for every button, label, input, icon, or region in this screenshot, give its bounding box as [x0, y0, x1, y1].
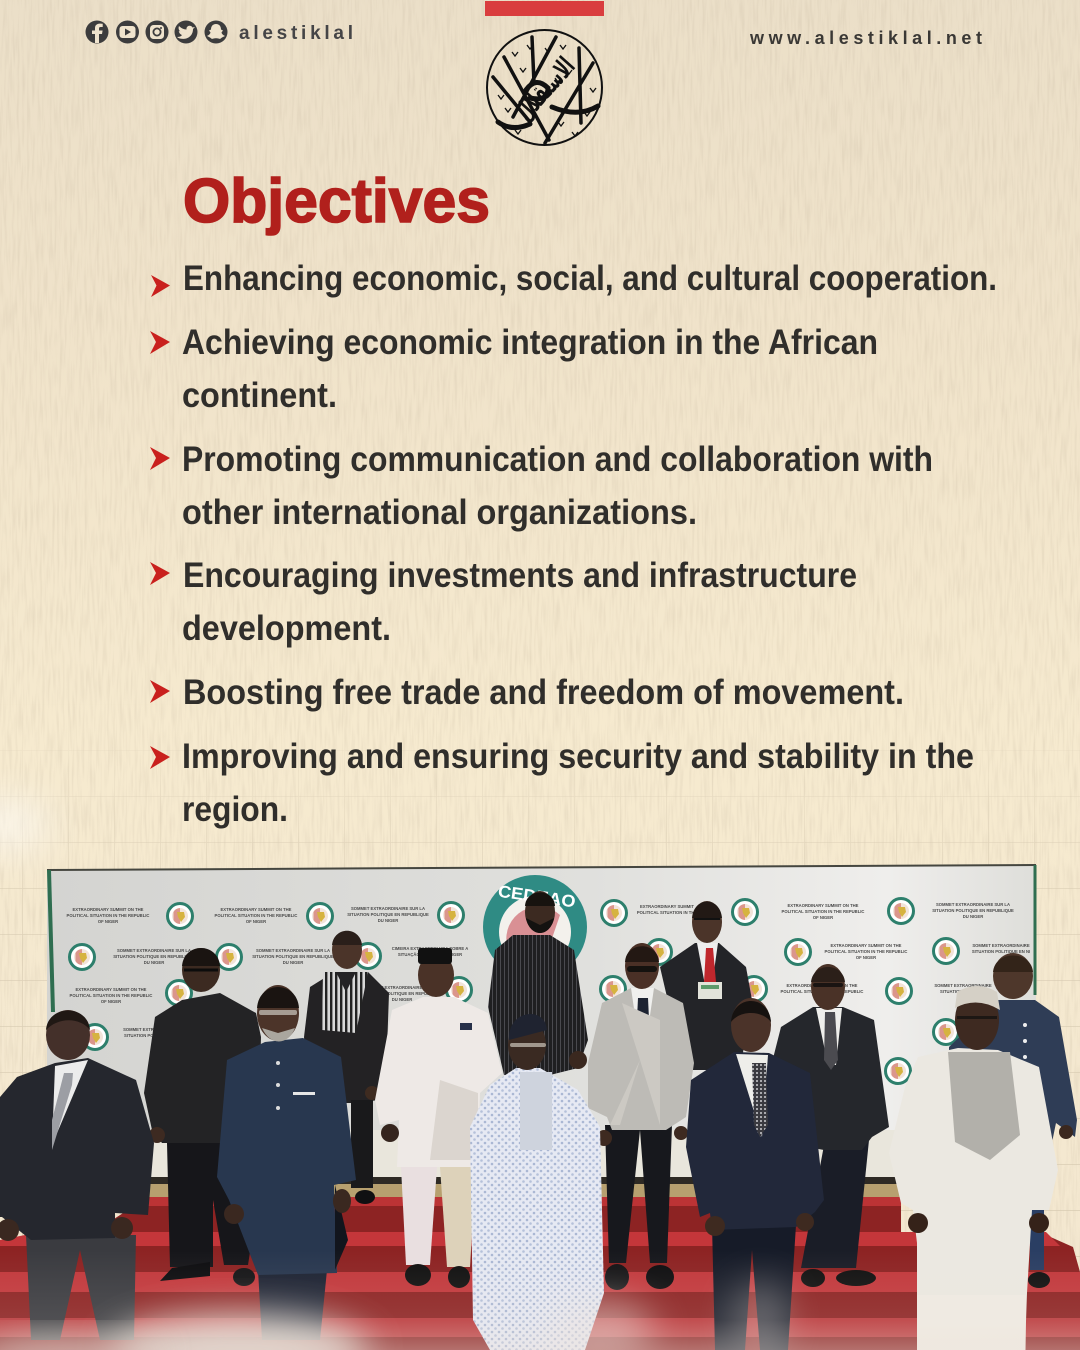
- handle text: alestiklal: [239, 23, 353, 44]
- icon: youtube: [116, 20, 139, 44]
- stage floor and steps: [0, 1177, 1080, 1350]
- mist at bottom of photo: [0, 1250, 1080, 1350]
- man: black shirt, back left: [144, 948, 261, 1286]
- red top bar: [485, 1, 604, 16]
- backdrop summit captions: EXTRAORDINARY SUMMIT ON THE: [831, 943, 902, 948]
- group photo of leaders: [0, 865, 1080, 1350]
- backdrop summit captions: SITUATION POLITIQUE EN REPUBLIQUE: [347, 912, 429, 917]
- backdrop summit captions: OF NIGER: [813, 915, 833, 920]
- backdrop summit captions: SOMMET EXTRA: [123, 1027, 157, 1032]
- objective 4: [182, 556, 857, 648]
- backdrop summit captions: EXTRAORDINARY SUMMIT ON THE: [73, 907, 144, 912]
- objective 1: Enhancing economic, social, and cultural cooperation.: [183, 259, 997, 298]
- arrow 2: [150, 331, 170, 354]
- objective 6: region.: [182, 790, 288, 829]
- man: white kaftan with black cap: [375, 948, 502, 1288]
- backdrop summit captions: EXTRAORDINARY SUMMIT ON THE: [787, 983, 858, 988]
- backdrop ECOWAS emblems: [70, 898, 958, 1084]
- man: denim shirt, far right: [949, 953, 1077, 1288]
- title: Objectives: [183, 167, 490, 236]
- backdrop summit captions: POLITICAL SITUATION IN THE REPUBLIC: [782, 909, 864, 914]
- icon: facebook: [86, 20, 108, 44]
- backdrop summit captions: SITUATION POLITIQUE EN NI: [972, 949, 1030, 954]
- backdrop summit captions: SOMMET EXTRAORDINAIRE: [972, 943, 1030, 948]
- objective 6: [182, 737, 974, 829]
- backdrop summit captions: OF NIGER: [856, 955, 876, 960]
- backdrop summit captions: SITUATION POLITIQUE EN REPUBLIQUE: [361, 991, 443, 996]
- objective 2: Achieving economic integration in the African: [182, 323, 878, 362]
- objective 6: Improving and ensuring security and stability in the: [182, 737, 974, 776]
- objective 4: development.: [182, 609, 391, 648]
- backdrop summit captions: [67, 902, 1030, 1038]
- man: striped panel tunic: [304, 931, 389, 1204]
- man: back right, red tie and badge: [660, 901, 752, 1070]
- backdrop summit captions: SOMMET EXTRAORDINAIRE SUR LA: [351, 906, 425, 911]
- backdrop summit captions: SOMMET EXTRAORDINAIRE: [934, 983, 992, 988]
- backdrop summit captions: DU NIGER: [283, 960, 303, 965]
- large CEDEAO emblem: CEDEAO: [497, 882, 577, 911]
- backdrop summit captions: SOMMET EXTRAORDINAIRE SUR LA: [256, 948, 330, 953]
- backdrop summit captions: SITUATION POLITIQUE EN REPUBLIQUE: [252, 954, 334, 959]
- backdrop summit captions: POLITICAL SITUATION IN THE REPUBLIC: [67, 913, 149, 918]
- backdrop summit captions: DU NIGER: [144, 960, 164, 965]
- backdrop summit captions: SITUATION POLITIQUE EN REPUBLIQUE: [932, 908, 1014, 913]
- man: dark suit, far left: [0, 1010, 154, 1340]
- backdrop summit captions: SOMMET EXTRAORDINAIRE SUR LA: [936, 902, 1010, 907]
- icon: twitter: [174, 20, 198, 44]
- man: dark suit, right of centre back: [765, 964, 889, 1287]
- logo: calligraphic roundel: [487, 30, 602, 145]
- arrow 5: [150, 680, 170, 703]
- backdrop summit captions: SOMMET EXTRAORDINAIRE SUR LA: [117, 948, 191, 953]
- large CEDEAO emblem: [483, 875, 587, 979]
- arrow 3: [150, 447, 170, 470]
- objective 2: continent.: [182, 376, 337, 415]
- icon: instagram: [146, 20, 168, 44]
- man: navy kaftan, front left: [217, 985, 356, 1340]
- backdrop summit captions: SITUATION POLITIQUE EN REPUBLIQUE: [113, 954, 195, 959]
- backdrop summit captions: SITUATION POL: [124, 1033, 156, 1038]
- objective 4: Encouraging investments and infrastructure: [183, 556, 857, 595]
- backdrop summit captions: OF NIGER: [246, 919, 266, 924]
- arrow 6: [150, 746, 170, 769]
- man: light grey suit: [588, 943, 694, 1290]
- backdrop summit captions: EXTRAORDINARY SUMMIT ON THE: [221, 907, 292, 912]
- backdrop summit captions: CIMEIRA EXTRAORDINARIA SOBRE A: [392, 946, 468, 951]
- backdrop summit captions: EXTRAORDINARY SUMMIT: [640, 904, 694, 909]
- objective 2: [182, 323, 878, 415]
- backdrop summit captions: DU NIGER: [378, 918, 398, 923]
- backdrop summit captions: DU NIGER: [392, 997, 412, 1002]
- backdrop summit captions: POLITICAL SITUATION IN THE REPUBLIC: [825, 949, 907, 954]
- social icons: [86, 20, 228, 44]
- man: back centre, pinstriped tunic: [488, 891, 588, 1075]
- man: dark suit, front centre right: [686, 998, 824, 1350]
- backdrop summit captions: POLITICAL SITUATION IN THE REPUBLIC: [70, 993, 152, 998]
- backdrop summit captions: POLITICAL SITUATION IN THE: [637, 910, 697, 915]
- arrow 4: [150, 562, 170, 585]
- backdrop summit captions: OF NIGER: [98, 919, 118, 924]
- website text: www.alestiklal.net: [749, 28, 982, 48]
- backdrop summit captions: POLITICAL SITUATION IN THE REPUBLIC: [215, 913, 297, 918]
- icon: snapchat: [204, 20, 228, 44]
- backdrop summit captions: DU NIGER: [963, 914, 983, 919]
- backdrop wall: [47, 865, 1040, 1177]
- objectives list: [150, 259, 997, 829]
- objective 3: Promoting communication and collaboration with: [182, 440, 933, 479]
- arrow 1: [151, 275, 170, 297]
- objective 3: [182, 440, 933, 532]
- logo: calligraphic roundel: الاستقلال: [510, 52, 581, 127]
- backdrop summit captions: SOMMET EXTRAORDINAIRE SUR LA: [365, 985, 439, 990]
- man: white patterned agbada, centre: [470, 1014, 604, 1350]
- objective 3: other international organizations.: [182, 493, 697, 532]
- objective 5: Boosting free trade and freedom of movement.: [183, 673, 904, 712]
- backdrop summit captions: SITUAÇÃO POLITICA DO NIGER: [398, 952, 462, 957]
- backdrop summit captions: POLITICAL SITUATION IN THE REPUBLIC: [781, 989, 863, 994]
- backdrop summit captions: EXTRAORDINARY SUMMIT ON THE: [76, 987, 147, 992]
- backdrop summit captions: EXTRAORDINARY SUMMIT ON THE: [788, 903, 859, 908]
- backdrop summit captions: OF NIGER: [101, 999, 121, 1004]
- man: white robe and kufi, far right front: [889, 986, 1058, 1350]
- backdrop summit captions: SITUATION POLITIQUE: [940, 989, 986, 994]
